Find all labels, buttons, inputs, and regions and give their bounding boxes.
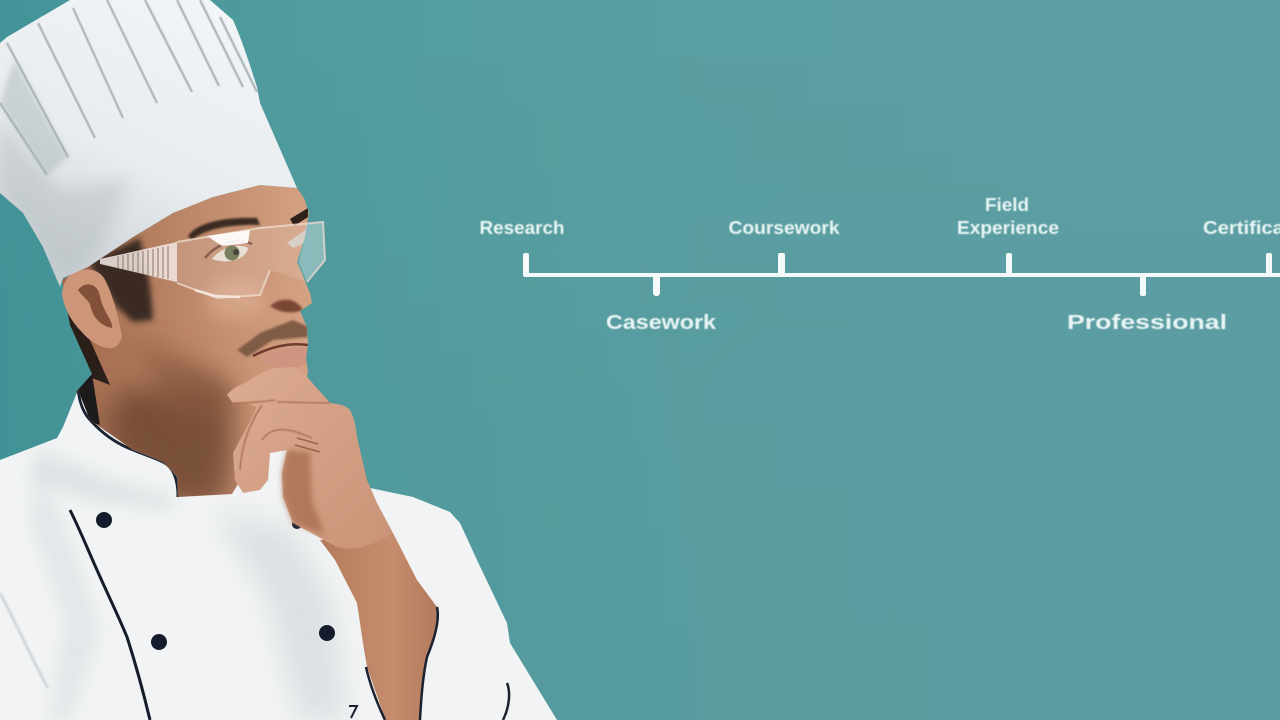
jacket shadow under hand <box>228 516 345 720</box>
hand <box>227 367 393 549</box>
jacket front piping <box>70 510 150 720</box>
timeline <box>480 195 1280 334</box>
label: research: Research <box>480 218 564 238</box>
sleeve cuff piping <box>366 607 438 720</box>
jacket body <box>0 380 570 720</box>
sleeve piping right <box>503 683 509 720</box>
finger creases <box>233 400 330 470</box>
neck shadow <box>105 385 235 505</box>
label: coursework: Coursework <box>728 218 841 238</box>
eye shadow <box>205 241 252 258</box>
inner lapel piping <box>349 706 357 718</box>
jaw shadow <box>135 340 239 412</box>
left fold shadow <box>34 492 96 714</box>
inner ear <box>78 284 112 328</box>
lens highlight <box>207 230 250 246</box>
marker: certification <box>1266 253 1272 274</box>
collar piping <box>78 390 178 497</box>
label: field experience: Field <box>985 195 1029 215</box>
marker: professional <box>1140 275 1146 296</box>
buttons <box>96 512 335 650</box>
ear <box>62 269 122 348</box>
chef figure <box>0 0 570 720</box>
marker: coursework <box>778 253 785 274</box>
pupil <box>233 249 239 255</box>
marker: field experience <box>1006 253 1012 274</box>
far eye <box>287 230 306 248</box>
knuckle crease <box>295 438 320 452</box>
cheek highlight <box>205 280 265 320</box>
mouth line <box>253 344 308 356</box>
label: professional: Professional <box>1067 312 1227 334</box>
hat pleats <box>0 0 257 175</box>
lower lip <box>290 348 308 368</box>
forearm <box>320 533 438 720</box>
sleeve crease <box>0 593 48 688</box>
hat shaded pleat <box>0 60 68 175</box>
lens bottom glint <box>195 290 240 297</box>
label: casework: Casework <box>606 312 717 334</box>
eye near <box>212 246 248 261</box>
stubble <box>237 320 308 357</box>
hat lower shadow <box>0 130 127 270</box>
iris <box>224 246 240 260</box>
eyebrow near <box>188 218 260 240</box>
far lens tint <box>299 222 325 282</box>
chef hat <box>0 0 300 290</box>
head and neck <box>62 185 312 497</box>
collar shadow <box>33 454 168 509</box>
label: field experience: Experience <box>957 218 1059 238</box>
nostril shadow <box>270 300 303 312</box>
marker: casework <box>653 275 660 296</box>
hair sideburn <box>88 238 153 322</box>
safety glasses <box>100 222 325 298</box>
hair behind ear <box>68 312 110 385</box>
palm shadow <box>282 450 325 535</box>
timeline axis <box>524 273 1280 277</box>
glasses arm ribs <box>100 242 177 282</box>
eyebrow far <box>290 208 308 226</box>
marker: research <box>523 253 529 277</box>
inner collar dark <box>76 374 100 425</box>
